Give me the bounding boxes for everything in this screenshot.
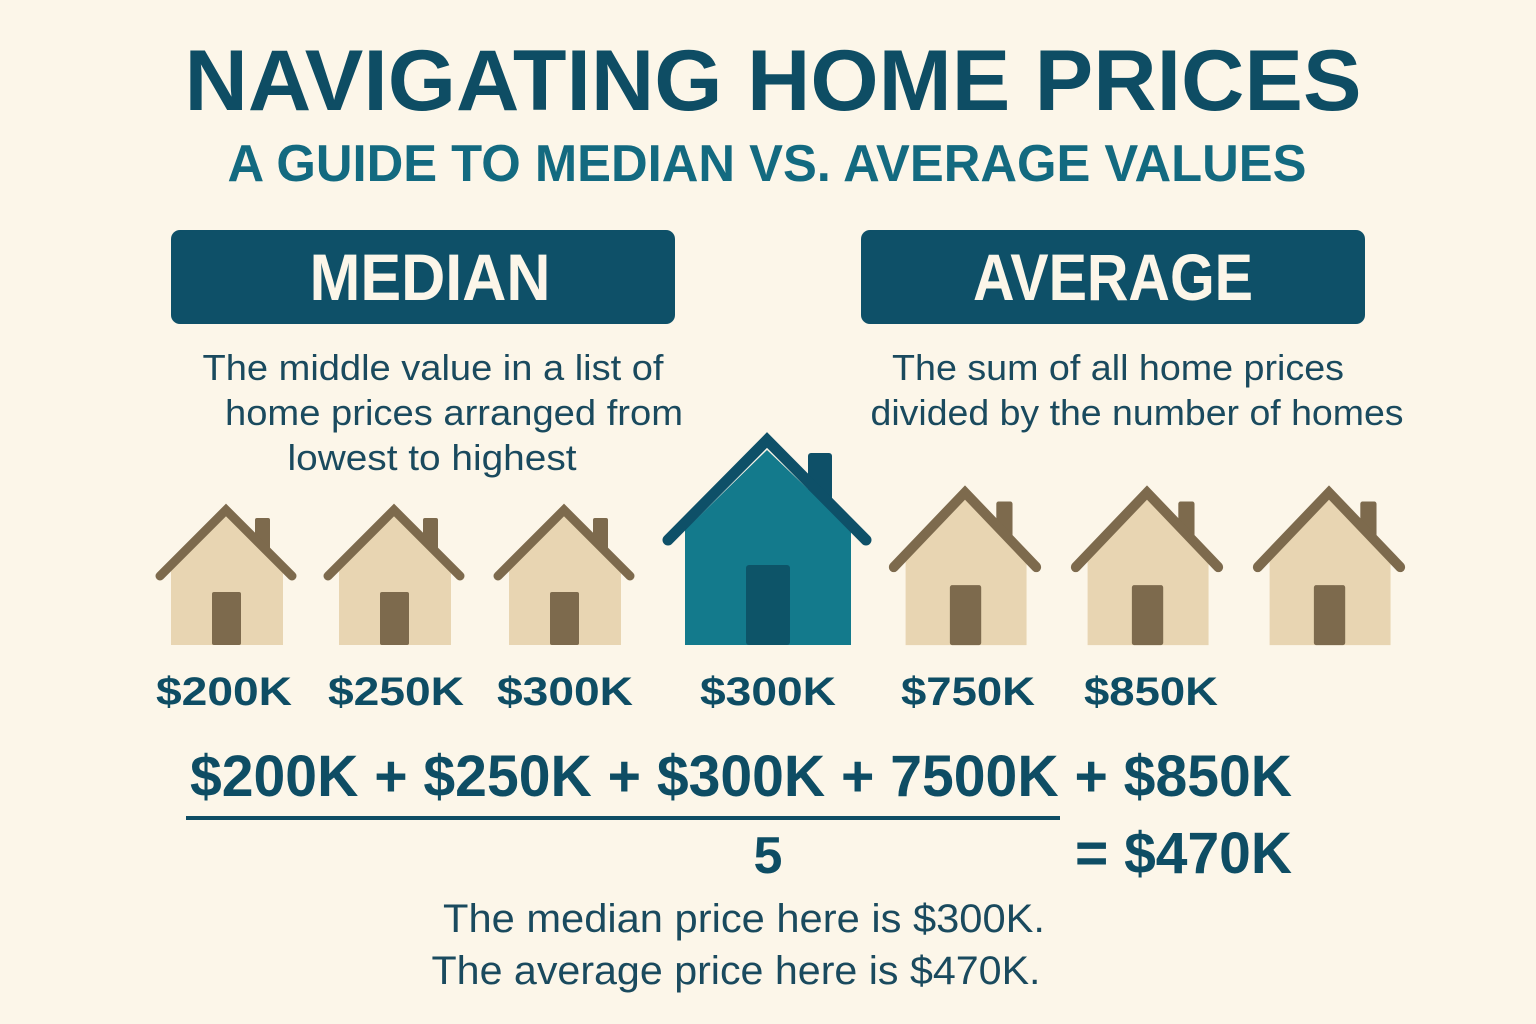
price labels: $300K bbox=[700, 670, 836, 714]
fraction line bbox=[186, 816, 1060, 820]
median definition text: The middle value in a list of bbox=[202, 347, 665, 388]
icon: house 3 bbox=[498, 510, 630, 645]
formula result: = $470K bbox=[1075, 821, 1292, 886]
price labels: $850K bbox=[1084, 670, 1218, 714]
summary text bbox=[432, 897, 1045, 993]
median definition text: home prices arranged from bbox=[225, 392, 683, 433]
formula numerator: $200K + $250K + $300K + 7500K + $850K bbox=[190, 744, 1292, 809]
summary text: The median price here is $300K. bbox=[443, 897, 1045, 941]
median definition text: lowest to highest bbox=[288, 437, 576, 478]
panel: average header: AVERAGE bbox=[973, 240, 1253, 314]
icon: house 6 bbox=[1076, 493, 1218, 645]
average definition text bbox=[870, 347, 1404, 433]
price labels: $250K bbox=[328, 670, 464, 714]
median definition text bbox=[202, 347, 683, 478]
icon: house 7 bbox=[1258, 493, 1400, 645]
average definition text: divided by the number of homes bbox=[870, 392, 1404, 433]
icon: house 5 bbox=[894, 493, 1036, 645]
price labels: $300K bbox=[497, 670, 633, 714]
formula denominator: 5 bbox=[754, 827, 782, 885]
panel: average header bbox=[861, 230, 1365, 324]
icon: house 2 bbox=[328, 510, 460, 645]
icon: median house (teal) bbox=[668, 440, 866, 645]
panel: median header: MEDIAN bbox=[310, 240, 550, 314]
icon: house 1 bbox=[160, 510, 292, 645]
price labels: $200K bbox=[156, 670, 292, 714]
summary text: The average price here is $470K. bbox=[432, 949, 1040, 993]
average definition text: The sum of all home prices bbox=[892, 347, 1344, 388]
price labels bbox=[156, 670, 1218, 714]
price labels: $750K bbox=[901, 670, 1035, 714]
title: NAVIGATING HOME PRICES bbox=[184, 33, 1362, 129]
subtitle: A GUIDE TO MEDIAN VS. AVERAGE VALUES bbox=[228, 135, 1306, 193]
panel: median header bbox=[171, 230, 675, 324]
